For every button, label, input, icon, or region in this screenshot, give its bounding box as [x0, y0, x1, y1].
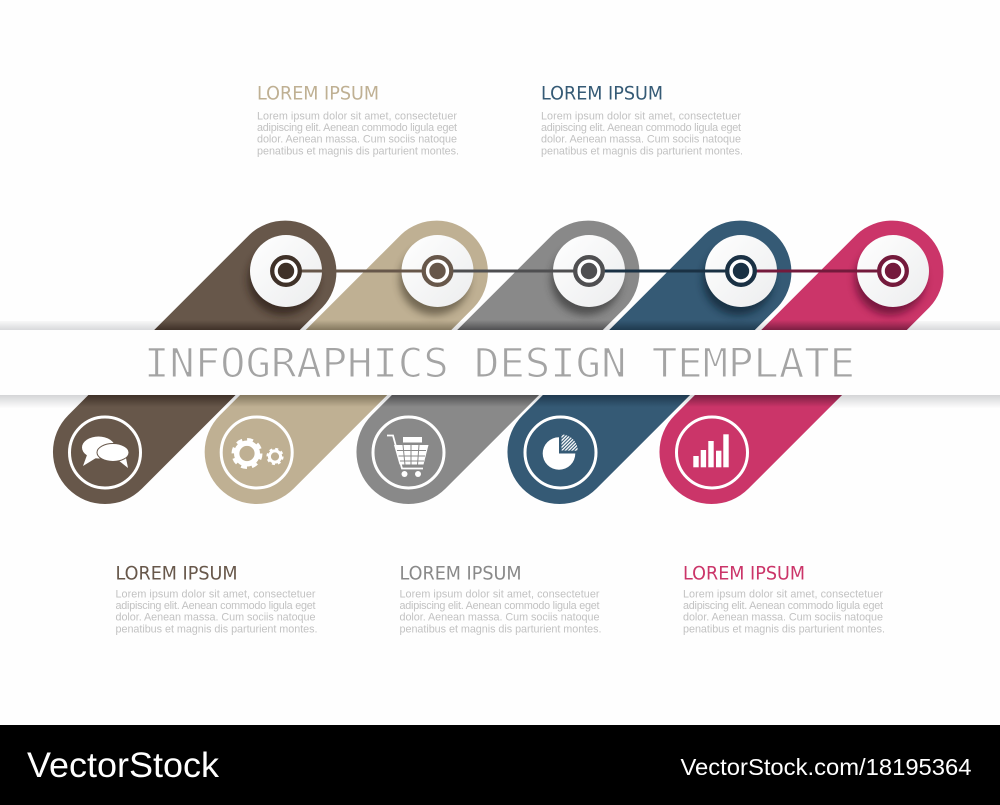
text block: grey heading bottom: Lorem ipsum dolor sit amet, consectetuer	[400, 588, 600, 600]
text block: blue heading top: penatibus et magnis dis parturient montes.	[541, 146, 743, 158]
text block: pink heading bottom: LOREM IPSUM	[683, 562, 805, 584]
panel: blue bottom tab	[507, 395, 690, 504]
text block: grey heading bottom: adipiscing elit. Aenean commodo ligula eget	[400, 600, 600, 612]
text block: grey heading bottom	[400, 562, 602, 636]
timeline node: blue	[727, 257, 755, 285]
text block: brown heading bottom: penatibus et magnis dis parturient montes.	[116, 624, 318, 636]
icon: speech bubbles	[70, 417, 140, 488]
text block: blue heading top	[541, 82, 743, 158]
band shadow strips	[0, 321, 1000, 408]
text block: tan heading top: penatibus et magnis dis parturient montes.	[257, 146, 459, 158]
title: INFOGRAPHICS DESIGN TEMPLATE	[144, 341, 855, 387]
text block: pink heading bottom	[683, 562, 885, 636]
text block: tan heading top: dolor. Aenean massa. Cum sociis natoque	[257, 134, 457, 146]
text block: pink heading bottom: Lorem ipsum dolor sit amet, consectetuer	[683, 588, 883, 600]
panel: brown top tab	[154, 221, 336, 330]
text block: brown heading bottom: dolor. Aenean massa. Cum sociis natoque	[116, 612, 316, 624]
panel: grey top tab	[457, 221, 639, 330]
text block: tan heading top: adipiscing elit. Aenean commodo ligula eget	[257, 122, 457, 134]
text block: blue heading top: adipiscing elit. Aenean commodo ligula eget	[541, 122, 741, 134]
text block: brown heading bottom: Lorem ipsum dolor sit amet, consectetuer	[116, 588, 316, 600]
text block: pink heading bottom: dolor. Aenean massa. Cum sociis natoque	[683, 612, 883, 624]
text block: tan heading top: Lorem ipsum dolor sit amet, consectetuer	[257, 110, 457, 122]
text block: tan heading top: LOREM IPSUM	[257, 82, 379, 104]
text block: blue heading top: Lorem ipsum dolor sit amet, consectetuer	[541, 110, 741, 122]
panel: tan top tab	[306, 221, 488, 330]
timeline node: tan	[424, 257, 451, 285]
panel: blue top tab	[609, 221, 791, 330]
panel: pink top tab	[761, 221, 943, 330]
panel: grey bottom tab	[356, 395, 539, 504]
text block: grey heading bottom: dolor. Aenean massa. Cum sociis natoque	[400, 612, 600, 624]
icon: bar chart	[676, 417, 748, 488]
text block: blue heading top: LOREM IPSUM	[541, 82, 663, 104]
text block: brown heading bottom	[116, 562, 318, 636]
icon: shopping cart	[373, 417, 444, 488]
panel: tan bottom tab	[205, 395, 387, 504]
text block: blue heading top: dolor. Aenean massa. Cum sociis natoque	[541, 134, 741, 146]
text block: grey heading bottom: penatibus et magnis dis parturient montes.	[400, 624, 602, 636]
text block: brown heading bottom: LOREM IPSUM	[116, 562, 238, 584]
timeline connector lines	[300, 270, 879, 272]
text block: brown heading bottom: adipiscing elit. Aenean commodo ligula eget	[116, 600, 316, 612]
white discs	[250, 235, 929, 307]
icon: gears	[221, 417, 292, 488]
footer bar	[0, 725, 1000, 805]
panel: brown bottom tab	[53, 395, 236, 504]
panel: pink bottom tab	[659, 395, 842, 504]
text block: pink heading bottom: penatibus et magnis dis parturient montes.	[683, 624, 885, 636]
timeline node: pink	[879, 257, 907, 285]
timeline node: grey	[575, 257, 603, 285]
text block: grey heading bottom: LOREM IPSUM	[400, 562, 522, 584]
text block: tan heading top	[257, 82, 459, 158]
timeline node: brown	[272, 257, 300, 285]
footer bar: VectorStock	[27, 746, 220, 785]
footer bar: VectorStock.com/18195364	[680, 754, 972, 780]
title band	[0, 330, 1000, 395]
icon: pie chart	[525, 417, 596, 488]
text block: pink heading bottom: adipiscing elit. Aenean commodo ligula eget	[683, 600, 883, 612]
